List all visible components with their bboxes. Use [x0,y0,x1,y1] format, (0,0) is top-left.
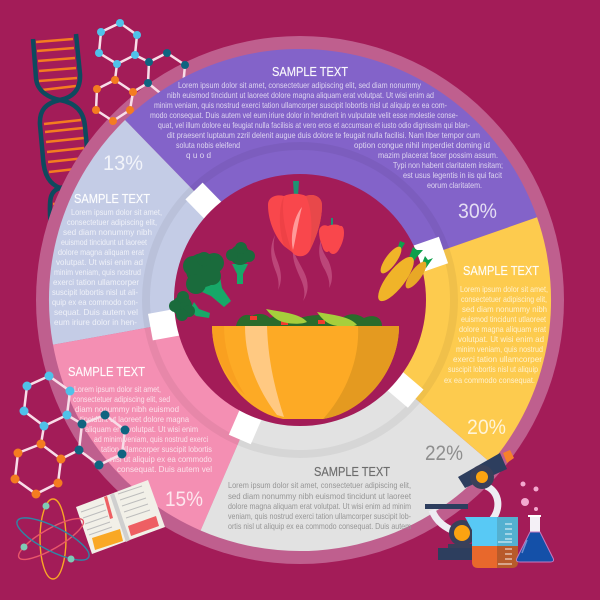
percent: 15%: 15% [165,488,203,511]
icon: steam [271,235,332,301]
text block: pink: nisl ut aliquip ex ea commodo [110,455,212,464]
text block: purple: modo consequat. Duis autem vel eum iriure dolor in hendrerit in vulputate velit esse molestie conse- [150,111,458,120]
icon: corn [372,241,433,306]
text block: lavender: volutpat. Ut wisi enim ad [56,258,143,267]
text block: yellow: ex ea commodo consequat. [444,376,535,385]
text block: pink: ad minim veniam, quis nostrud exerci [94,435,208,444]
text block: lavender: sequat. Duis autem vel [54,308,138,317]
text block: yellow: minim veniam, quis nostrud [456,345,543,354]
text block: purple: Lorem ipsum dolor sit amet, consectetuer adipiscing elit, sed diam nonummy [178,81,422,90]
icon: bowl [212,326,399,419]
icon: beaker [465,517,518,568]
icon: broccoli [169,242,255,321]
text block: yellow [444,285,548,385]
heading: pink: SAMPLE TEXT [68,364,145,379]
panel: pink 15% [53,300,300,530]
icon: bubbles [520,482,538,511]
text block: pink: consequat. Duis autem vel [117,465,212,474]
icon: flask [516,515,554,562]
text block: purple: q u o d [186,151,211,160]
text block: pink: aliquam erat volutpat. Ut wisi enim [85,425,198,434]
text block: lavender: consectetuer adipiscing elit, [67,218,157,227]
text block: purple: option congue nihil imperdiet doming id [354,141,490,150]
icon: salad in bowl [212,309,399,419]
text block: lavender [52,208,162,327]
icon: atom [12,499,94,579]
panel: lavender 13% [49,120,300,345]
text block: pink [73,385,212,474]
text block: yellow: dolore magna aliquam erat [459,325,547,334]
percent: 30%: 30% [458,200,497,223]
text block: grey: veniam, quis nostrud exerci tation ullamcorper suscipit lob- [228,512,411,521]
text block: pink: consectetuer adipiscing elit, sed [73,395,170,404]
outer rim [36,36,564,564]
text block: yellow: sed diam nonummy nibh [462,305,547,314]
text block: grey: Lorem ipsum dolor sit amet, consectetuer adipiscing elit, [228,481,411,490]
text block: yellow: exerci tation ullamcorper [453,355,542,364]
text block: lavender: eum iriure dolor in hen- [54,318,137,327]
text block: lavender: minim veniam, quis nostrud [54,268,141,277]
text block: yellow: euismod tincidunt utlaoreet [461,315,547,324]
percent: 13%: 13% [103,152,143,175]
text block: grey: sed diam nonummy nibh euismod tincidunt ut laoreet [228,492,412,501]
icon: bottom molecule [10,372,130,498]
panel: purple 30% [125,49,537,300]
text block: lavender: dolore magna aliquam erat [58,248,145,257]
text block: grey [228,481,412,531]
text block: purple: Typi non habent claritatem insitam; [393,161,503,170]
text block: lavender: sed diam nonummy nibh [63,228,152,237]
text block: purple: dit praesent luptatum zzril delenit augue duis dolore te feugait nulla facilisi. Nam liber tempor cum [167,131,480,140]
text block: purple [150,81,503,190]
heading: grey: SAMPLE TEXT [314,464,390,479]
text block: yellow: Lorem ipsum dolor sit amet, [460,285,548,294]
heading: yellow: SAMPLE TEXT [463,263,539,278]
text block: pink: tincidunt ut laoreet dolore magna [80,415,189,424]
text block: yellow: volutpat. Ut wisi enim ad [458,335,544,344]
text block: purple: eorum claritatem. [427,181,482,190]
text block: pink: diam nonummy nibh euismod [75,405,179,414]
text block: pink: Lorem ipsum dolor sit amet, [74,385,161,394]
icon: small bell pepper [319,218,344,254]
icon: large bell pepper [268,181,322,256]
icon: open book [76,480,165,554]
text block: purple: soluta nobis eleifend [176,141,240,150]
center circle [174,174,426,426]
text block: lavender: euismod tincidunt ut laoreet [61,238,148,247]
white tabs [150,191,444,440]
icon: microscope [425,450,514,560]
panel: yellow 20% [300,217,551,463]
text block: grey: ortis nisl ut aliquip ex ea commodo consequat. Duis autem [228,522,411,531]
text block: yellow: consectetuer adipiscing elit, [461,295,547,304]
percent: 22%: 22% [425,442,463,465]
text block: grey: dolore magna aliquam erat volutpat. Ut wisi enim ad minim [228,502,411,511]
text block: yellow: suscipit lobortis nisl ut aliquip [448,365,538,374]
text block: lavender: suscipit lobortis nisl ut ali- [52,288,138,297]
text block: purple: nibh euismod tincidunt ut laoreet dolore magna aliquam erat volutpat. Ut wisi enim ad [167,91,434,100]
text block: lavender: quip ex ea commodo con- [52,298,138,307]
panel: grey 22% [201,300,491,551]
text block: purple: quat, vel illum dolore eu feugiat nulla facilisis at vero eros et accumsan et iusto odio dignissim qui blan- [158,121,470,130]
text block: lavender: exerci tation ullamcorper [53,278,139,287]
text block: purple: minim veniam, quis nostrud exerci tation ullamcorper suscipit lobortis nisl ut aliquip ex ea com- [154,101,447,110]
percent: 20%: 20% [467,416,506,439]
heading: purple: SAMPLE TEXT [272,64,348,79]
text block: lavender: Lorem ipsum dolor sit amet, [71,208,162,217]
heading: lavender: SAMPLE TEXT [74,191,150,206]
text block: purple: mazim placerat facer possim assum. [378,151,498,160]
text block: purple: est usus legentis in iis qui facit [403,171,503,180]
icon: DNA helix [33,34,88,252]
icon: top molecule [92,19,189,125]
text block: pink: tation ullamcorper suscipit lobortis [101,445,212,454]
